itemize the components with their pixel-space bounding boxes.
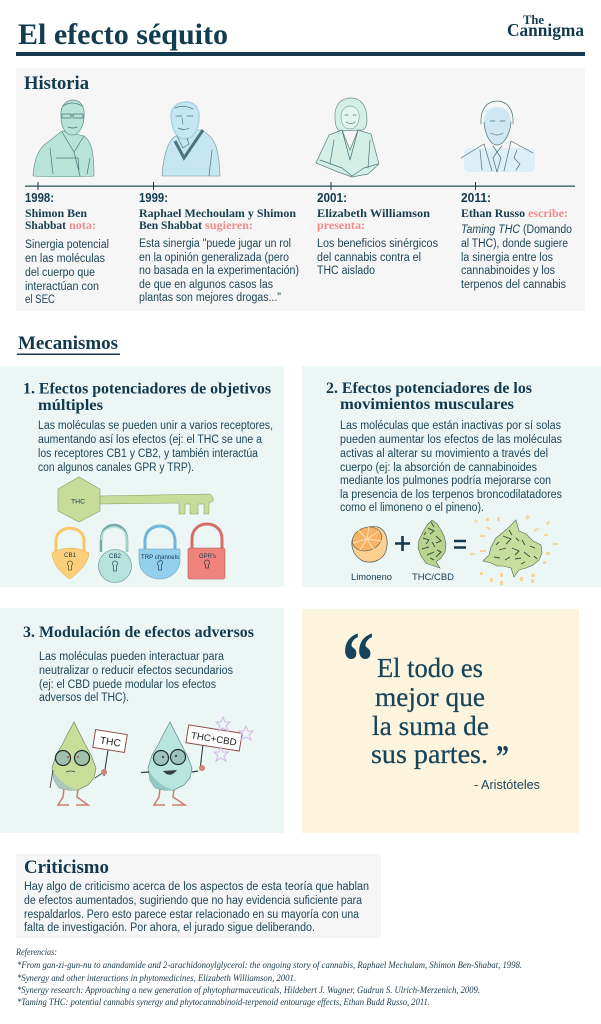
entry: 1998 [25,191,109,306]
character: THC leaf with sign [50,722,127,805]
entry: 2001: presenta: [317,218,365,232]
entry: 2001 [317,191,438,277]
entry: 1998: el SEC [25,294,55,306]
text: panel 3 body: (ej: el CBD puede modular los efectos [39,679,216,691]
heading: Mecanismos: Mecanismos [18,334,118,354]
entry: 1999: Ben Shabbat [139,218,202,232]
text: panel 2 body: pueden aumentar los efectos de las moléculas [340,434,562,446]
text: panel 2 body: activas al alterar su movimiento a través del [340,448,548,460]
entry: 2001: Elizabeth Williamson [317,206,430,220]
portrait: Raphael Mechoulam [162,102,220,176]
entry: 1999: no basada en la experimentación) [139,265,299,277]
entry: 1998: Shimon Ben [25,206,87,220]
text: panel 2 body: mediante los pulmones podría mejorarse con [340,475,551,487]
icon: CB2 lock [98,525,132,582]
quote mark: opening: “ [342,615,374,709]
entry: 2011: (Domando [523,224,572,236]
text: criticism body: falta de investigación. Por ahora, el jurado sigue deliberando. [24,922,315,934]
heading: panel 2: 2. Efectos potenciadores de los [326,380,532,397]
quote text: mejor que [375,682,485,712]
icon: CB2 lock: CB2 [109,553,121,560]
text: panel 3 body: neutralizar o reducir efectos secundarios [39,665,233,677]
entry: 2001: THC aislado [317,265,375,277]
portrait: Ethan Russo [461,101,535,172]
panel: 1. efectos potenciadores de objetivos múltiples [0,366,284,587]
text: panel 1 body: los receptores CB1 y CB2, y también interactúa [38,448,259,460]
entry: 1999: en la opinión generalizada (pero [139,252,289,264]
entry: 2011: 2011: [461,191,491,205]
title: El efecto séquito [18,18,228,51]
entry: 1999: sugieren: [205,218,253,232]
heading: panel 1: 1. Efectos potenciadores de objetivos [23,380,271,398]
timeline [25,182,575,190]
text: panel 3 body: adversos del THC). [39,692,129,704]
icon: CB1 lock [52,528,89,579]
panel: Aristotle quote [302,609,579,833]
icon: THC key: THC [71,498,85,506]
heading: panel 2: movimientos musculares [340,396,514,413]
quote text: El todo es [377,653,483,683]
references: *From gan-zi-gun-nu to anandamide and 2-arachidonoylglycerol: the ongoing story of cannabis, Raphael Mechulam, Shimon Ben-Shabat, 1998. [17,960,522,971]
text: criticism body: Hay algo de criticismo acerca de los aspectos de esta teoría que hablan [24,881,369,893]
character: THC+CBD leaf with sign: THC+CBD [190,730,237,749]
icon: cannabis bud [418,520,446,568]
entry: 2001: Los beneficios sinérgicos [317,238,438,250]
heading: panel 1: múltiples [38,397,103,414]
text: panel 1 body [38,420,273,474]
entry: 1999: 1999: [139,191,168,205]
text: panel 1 body: con algunos canales GPR y TRP). [38,462,194,474]
entry: 2011: Taming THC [461,224,521,236]
title [16,18,585,56]
heading: panel 1 [23,380,271,414]
text: panel 2 body: la presencia de los terpenos broncodilatadores [340,489,562,501]
icon: CB1 lock: CB1 [64,552,76,559]
entry: 2011: cannabinoides y los [461,265,555,277]
panel: 2. efectos potenciadores de los movimientos musculares [302,366,601,587]
entry: 2011: escribe: [528,206,568,220]
entry: 1999: Raphael Mechoulam y Shimon [139,206,296,220]
text: panel 3 body: Las moléculas pueden interactuar para [39,651,225,663]
quote mark: closing: ” [496,738,509,774]
text: panel 2 body: cuerpo (ej: la absorción de cannabinoides [340,462,537,474]
heading: Historia: Historia [24,74,89,94]
references [15,947,522,1008]
references: *Taming THC: potential cannabis synergy and phytocannabinoid-terpenoid entourage effects, Ethan Budd Russo, 2011. [17,997,430,1008]
quote text: sus partes. [371,739,488,769]
entry: 2011: Ethan Russo [461,206,525,220]
entry: 2011: al THC), donde sugiere [461,238,568,250]
references: *Synergy research: Approaching a new generation of phytopharmaceuticals, Hildebert J. Wagner, Gudrun S. Ulrich-Merzenich, 2009. [17,985,480,996]
quote text: la suma de [372,711,489,741]
text: criticism body: respaldarlos. Pero esto parece estar relacionado en su mayoría con una [24,909,360,921]
panel: Criticismo [16,854,381,938]
entry: 1999: plantas son mejores drogas..." [139,292,281,304]
character: THC leaf with sign: THC [99,735,121,750]
entry: 2001: del cannabis contra el [317,252,421,264]
entry: 1998: en las moléculas [25,253,105,265]
icon: TRP channels lock: TRP channels [141,555,179,561]
entry: 1998: Sinergia potencial [25,239,109,251]
text: panel 3 body [39,651,233,704]
icon: equals [454,541,466,548]
icon: energised bud [470,515,558,585]
entry: 2011 [461,191,572,291]
logo: The Cannigma: The [523,13,544,27]
entry: 1998: del cuerpo que [25,267,95,279]
heading: panel 2 [326,380,532,413]
quote text [371,653,489,769]
logo: The Cannigma: Cannigma [507,20,584,40]
icon: GPRs lock: GPR's [199,553,217,560]
icon: GPRs lock [188,524,225,579]
entry: 1998: Shabbat [25,218,66,232]
label: Limoneno: Limoneno [351,572,392,583]
panel: 3. modulación de efectos adversos [0,608,284,833]
attribution: - Aristóteles [474,777,540,792]
entry: 1999: Esta sinergia "puede jugar un rol [139,238,291,250]
references: Referencias: [15,947,57,958]
text: panel 1 body: aumentando así los efectos (ej: el THC se une a [38,434,263,446]
text: panel 1 body: Las moléculas se pueden unir a varios receptores, [38,420,273,432]
entry: 1998: nota: [69,218,96,232]
character: THC+CBD leaf with sign [141,717,253,805]
text: panel 2 body [340,420,562,514]
entry: 2001: 2001: [317,191,347,205]
icon: lemon [349,523,387,562]
panel: Historia [16,68,585,311]
text: panel 2 body: Las moléculas que están inactivas por sí solas [340,420,561,432]
entry: 1998: 1998: [25,191,54,205]
portrait: Elizabeth Williamson [316,98,379,177]
entry: 1999 [139,191,299,304]
icon: THC key [58,477,213,522]
text: criticism body [24,881,369,934]
entry: 1999: de que en algunos casos las [139,279,273,291]
text: panel 2 body: como el limoneno o el pineno). [340,502,484,514]
heading: Criticismo: Criticismo [24,857,109,878]
text: criticism body: de efectos aumentados, sugiriendo que no hay evidencia suficiente para [24,895,363,907]
label: THC/CBD: THC/CBD [412,572,454,583]
entry: 1998: interactúan con [25,281,99,293]
entry: 2011: la sinergia entre los [461,252,553,264]
icon: TRP channels lock [139,526,180,579]
references: *Synergy and other interactions in phytomedicines, Elizabeth Williamson, 2001. [17,974,296,984]
entry: 2011: terpenos del cannabis [461,279,566,291]
heading: panel 3: 3. Modulación de efectos adversos [23,624,254,641]
icon: plus [395,536,410,551]
portrait: Shimon Ben Shabbat [33,100,94,177]
